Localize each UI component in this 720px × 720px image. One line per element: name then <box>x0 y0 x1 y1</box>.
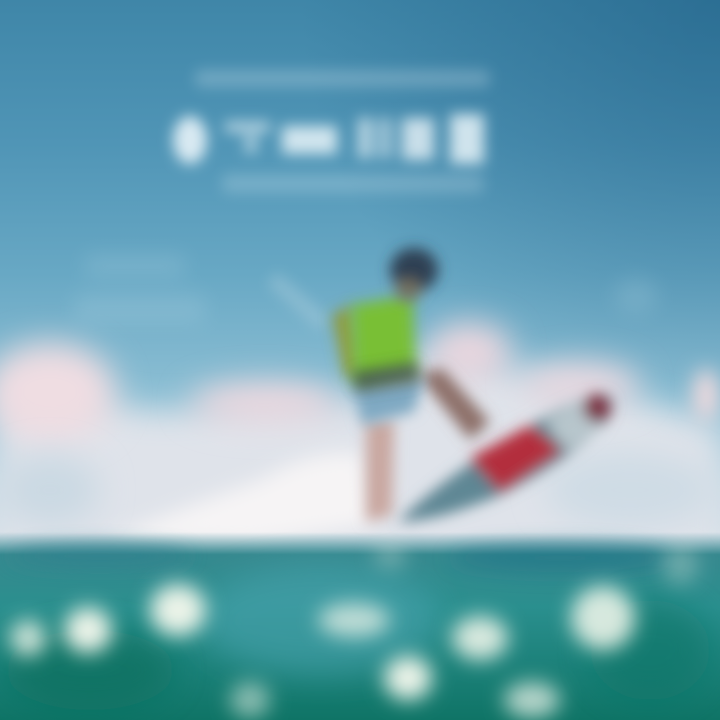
legs <box>366 368 490 522</box>
water highlights <box>10 541 698 718</box>
sea <box>0 532 720 720</box>
kiteboard <box>400 394 612 522</box>
torso: green shirt <box>352 295 416 384</box>
subtitle: blurred text line <box>222 174 484 193</box>
arm <box>332 305 362 378</box>
shorts <box>352 378 425 425</box>
kite bar and lines <box>272 278 325 325</box>
head <box>390 248 438 301</box>
kitesurfer <box>332 248 490 522</box>
faint text block left <box>75 255 205 323</box>
title: blurred heading text <box>173 70 490 164</box>
waist shadow <box>352 362 420 392</box>
clouds <box>0 322 720 590</box>
faint glow right <box>614 278 658 314</box>
title main line <box>173 114 484 164</box>
